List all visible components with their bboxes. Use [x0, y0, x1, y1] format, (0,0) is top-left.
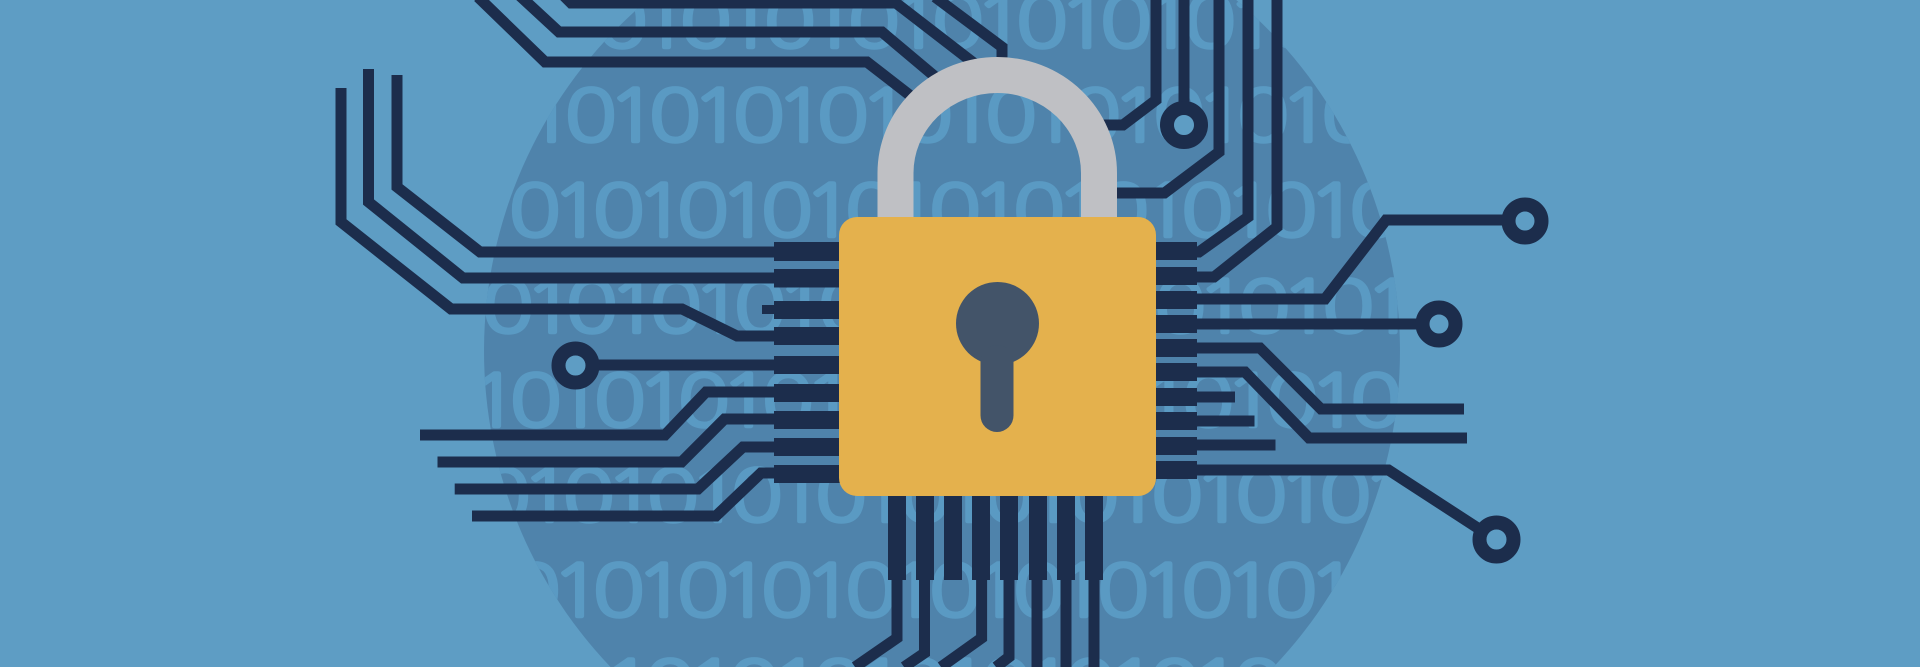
connector node: right middle — [1422, 308, 1456, 340]
connector pads: right — [1150, 242, 1197, 479]
padlock shackle — [895, 75, 1099, 225]
binary digit pattern: 10101010101010101010101 — [467, 365, 1434, 438]
binary digit pattern: 01010101010101010101010 — [478, 460, 1452, 533]
circuit traces: bottom — [855, 570, 1094, 667]
connector pads: bottom — [888, 490, 1103, 580]
circuit traces: top right — [1090, 0, 1277, 277]
connector node: top right — [1167, 108, 1201, 142]
connector pads: left — [762, 242, 843, 483]
circuit traces: top left — [478, 0, 1002, 107]
connector node: left — [558, 348, 592, 382]
binary digit pattern: 0101010101010101010101 — [508, 175, 1433, 248]
binary digit pattern: 01010101010101010101010 — [481, 271, 1455, 344]
circuit traces: right — [1160, 220, 1524, 536]
circuit traces: left — [341, 69, 800, 516]
padlock body — [839, 217, 1156, 496]
binary digit pattern — [467, 0, 1455, 667]
connector node: right lower — [1480, 522, 1514, 556]
connector node: right upper — [1508, 204, 1542, 238]
binary digit pattern: 0101010101010101010101 — [508, 555, 1433, 628]
binary digit pattern: 1010101010101010101010 — [522, 80, 1454, 153]
illustration: padlock on circuit board — [336, 0, 1548, 667]
dark circle backdrop — [484, 0, 1400, 667]
keyhole — [956, 282, 1039, 432]
